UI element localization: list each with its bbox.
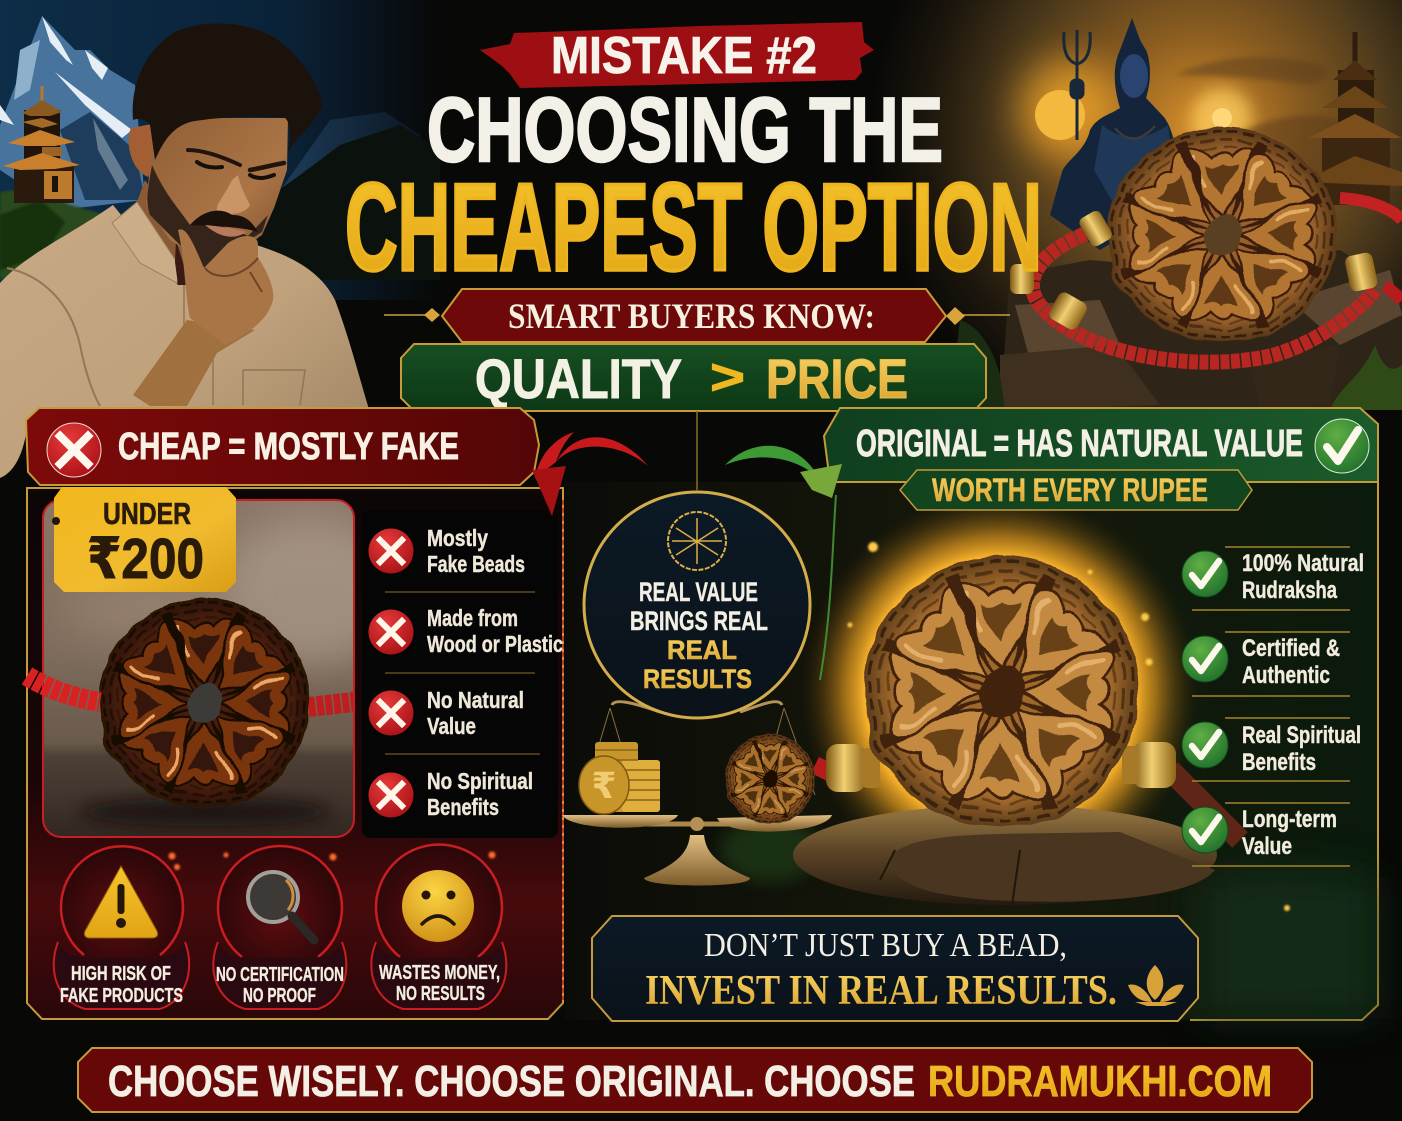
figure: thoughtful man [0,23,368,478]
man mustache [190,211,258,232]
man hair [133,23,322,160]
item: certified authentic [1182,635,1340,689]
icon: pagoda temple [3,86,80,203]
badge: high risk [54,846,189,1009]
banner: quality over price [401,344,986,411]
badge: no certification: NO PROOF [243,985,316,1007]
circle: real value message [584,492,810,718]
man neck [137,180,205,268]
man hand [178,229,273,345]
icon: trident [1064,30,1090,140]
callout: invest in real results [592,916,1198,1021]
man ear [129,124,156,177]
bead: natural rudraksha hero [863,556,1139,828]
item: no spiritual benefits [368,768,533,820]
man arm [133,320,255,406]
banner: quality over price: PRICE [766,347,908,410]
list: original benefits [1182,550,1364,860]
heading: choosing the: CHOOSING THE [427,80,943,181]
man nose and mustache [217,175,250,214]
item: wood or plastic: Made from [427,605,518,631]
footer: call to action: CHOOSE WISELY. CHOOSE ORIGINAL. CHOOSE [108,1057,915,1106]
circle: real value message: RESULTS [643,664,752,694]
icon: lotus [1128,965,1184,1006]
item: long-term value: Long-term [1242,806,1337,833]
man beard [147,165,268,268]
badge: wastes money: WASTES MONEY, [379,962,500,984]
icon: coin stack [579,742,660,814]
item: certified authentic: Certified & [1242,635,1340,662]
item: spiritual benefits: Benefits [1242,749,1316,776]
item: no natural value: Value [427,713,476,739]
badge: wastes money [371,845,506,1009]
scenery: rock ledge and foliage [950,250,1402,410]
man chest opening [175,240,190,285]
badge: high risk: FAKE PRODUCTS [60,985,183,1007]
badge: no certification [213,846,346,1009]
banner: smart buyers know: SMART BUYERS KNOW: [508,296,875,336]
man sleeve seam [7,268,100,406]
item: mostly fake beads: Fake Beads [427,551,525,577]
item: natural rudraksha: Rudraksha [1242,577,1337,604]
man pocket and placket [184,285,305,405]
callout: invest in real results: DON’T JUST BUY A BEAD, [704,927,1067,964]
circle: real value message: REAL VALUE [639,577,758,607]
panel: cheap (left) [27,488,563,1019]
cord: red bracelet [1032,198,1402,362]
arrow: green curve to original [725,446,842,680]
bead: top right rudraksha [1106,127,1338,343]
item: certified authentic: Authentic [1242,662,1330,689]
callout: invest in real results: INVEST IN REAL RESULTS. [645,968,1117,1014]
item: wood or plastic [368,605,563,657]
connector: center divider [696,411,698,490]
item: mostly fake beads: Mostly [427,525,488,551]
item: no spiritual benefits: Benefits [427,794,499,820]
item: spiritual benefits: Real Spiritual [1242,722,1361,749]
sparks [168,852,496,870]
footer: call to action: RUDRAMUKHI.COM [928,1057,1272,1106]
circle: real value message: BRINGS REAL [630,606,768,636]
bracelet: gold caps and red cord [815,742,1240,840]
figure: seated Shiva [1050,18,1178,250]
header: cheap equals mostly fake [26,408,539,485]
icon: coin stack: ₹ [591,765,617,806]
bead: natural bead on scale [725,734,815,824]
icon: gold caps on bracelet [1010,209,1379,332]
badge: no certification: NO CERTIFICATION [216,964,344,986]
tag: under 200 rupees: UNDER [103,496,191,531]
banner: quality over price: QUALITY [475,347,682,410]
item: long-term value: Value [1242,833,1292,860]
item: no natural value [368,687,524,739]
list: cheap drawbacks [368,525,563,820]
heading: Mistake #2 banner [480,22,874,88]
man body: kurta [0,205,368,478]
item: long-term value [1182,806,1337,860]
tag: under 200 rupees: ₹200 [87,527,204,591]
badge: high risk: HIGH RISK OF [71,963,171,985]
icon: green check badge [1315,419,1369,473]
item: natural rudraksha [1182,550,1364,604]
icon: bead line art [668,512,726,570]
icon: sunset temple [1302,32,1402,205]
man collar [112,202,180,283]
item: wood or plastic: Wood or Plastic [427,631,563,657]
icon: red cross badge [47,423,101,477]
circle: real value message: REAL [667,635,737,665]
item: mostly fake beads [368,525,525,577]
header: cheap equals mostly fake: CHEAP = MOSTLY FAKE [118,426,459,468]
header: original has natural value [824,408,1378,482]
scene: sunset with Shiva silhouette [850,0,1402,420]
panel list backdrop [362,510,558,838]
banner: worth every rupee: WORTH EVERY RUPEE [932,472,1208,508]
scene: night mountains and temple [0,0,440,300]
man eyes and brows [188,150,284,178]
banner: smart buyers know [384,289,1010,342]
scale: balance with coins and bead [562,702,832,886]
item: spiritual benefits [1182,722,1361,776]
item: natural rudraksha: 100% Natural [1242,550,1364,577]
sparkles: gold dots [848,542,1290,911]
photo: glossy fake bead [22,499,355,838]
glow: rudraksha aura [800,492,1200,892]
heading: Mistake #2 banner: MISTAKE #2 [551,27,817,85]
panel: original (right) [565,482,1378,1020]
arrow: red curve to cheap [532,432,648,516]
footer: call to action [78,1048,1312,1112]
item: no natural value: No Natural [427,687,524,713]
man face [146,118,288,268]
stone pedestal [793,805,1217,905]
badge: wastes money: NO RESULTS [396,983,485,1005]
tag: under 200 rupees [52,487,236,592]
item: no spiritual benefits: No Spiritual [427,768,533,794]
banner: quality over price: > [710,349,745,405]
